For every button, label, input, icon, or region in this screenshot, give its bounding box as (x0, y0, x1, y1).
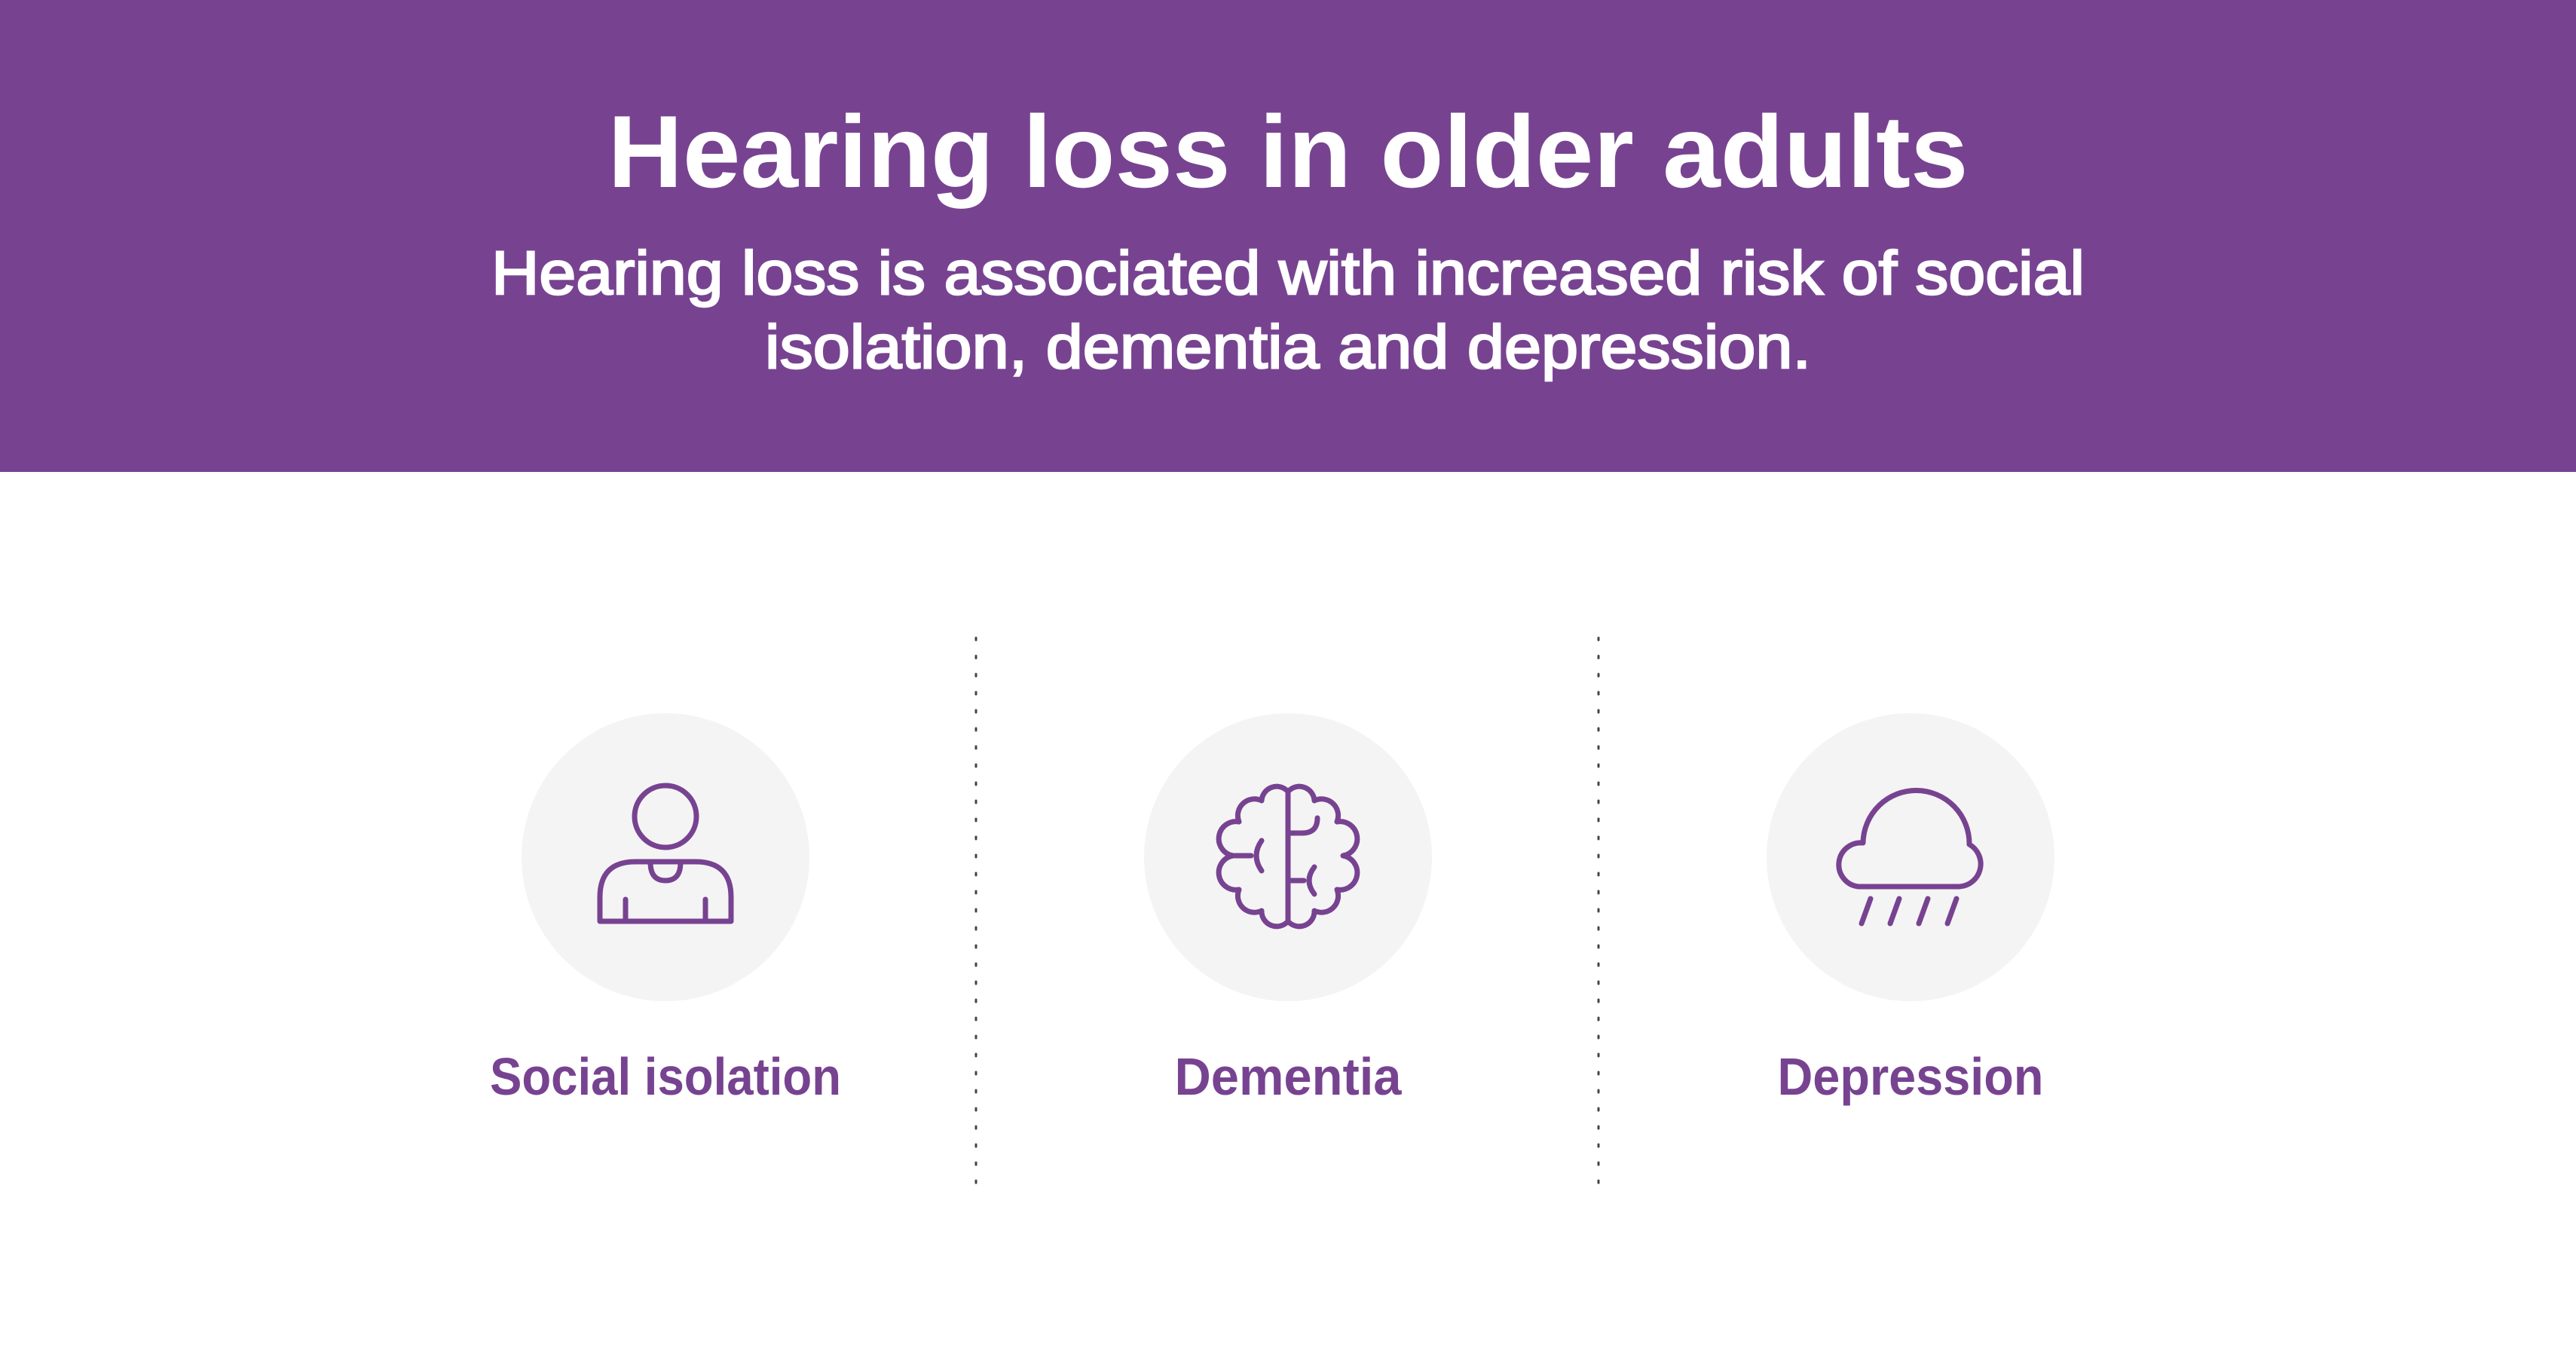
panel: social isolation (490, 713, 841, 1106)
label: Dementia (1174, 1047, 1403, 1106)
panel: depression (1767, 713, 2054, 1106)
subtitle: Hearing loss is associated with increased risk of social (491, 239, 2085, 308)
subtitle: isolation, dementia and depression. (765, 313, 1811, 381)
label: Depression (1777, 1047, 2044, 1106)
icon background circle (1144, 713, 1432, 1001)
divider: dotted line 1 (975, 638, 977, 1185)
panel: dementia (1144, 713, 1432, 1106)
icon: person (600, 786, 731, 921)
divider: dotted line 2 (1598, 638, 1599, 1185)
title: Hearing loss in older adults (607, 94, 1969, 209)
subtitle (491, 239, 2085, 381)
label: Social isolation (490, 1047, 841, 1106)
header banner (0, 0, 2576, 472)
icon: rain cloud (1839, 790, 1981, 924)
icon background circle (1767, 713, 2054, 1001)
icon: brain (1219, 786, 1357, 927)
icon background circle (522, 713, 809, 1001)
